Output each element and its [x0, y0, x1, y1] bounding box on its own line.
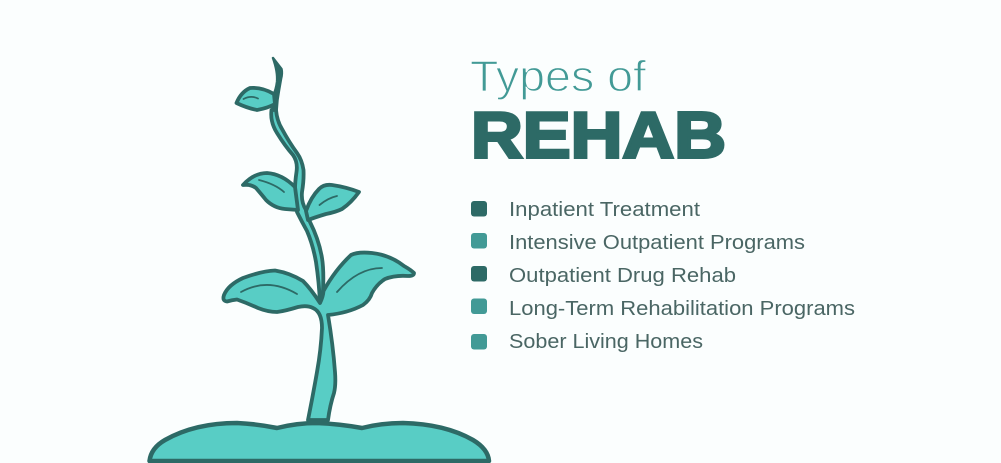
left large leaf vein [241, 285, 297, 294]
middle right leaf vein [320, 196, 337, 205]
item 5: Sober Living Homes [509, 331, 703, 353]
title: Types of: Types of [470, 52, 647, 101]
plant tip [272, 58, 282, 112]
right large leaf vein [337, 268, 382, 292]
item 3: Outpatient Drug Rehab [509, 265, 736, 287]
list of rehab types [471, 199, 855, 353]
middle left leaf vein [259, 180, 284, 192]
ground mound [150, 423, 489, 461]
item 1: Inpatient Treatment [509, 199, 700, 221]
bullet 2 [471, 233, 487, 248]
bullet 3 [471, 266, 487, 282]
large leaves and lower stem [223, 253, 414, 420]
item 4: Long-Term Rehabilitation Programs [509, 298, 855, 320]
upper stem [271, 110, 323, 303]
illustration: growing plant [150, 58, 489, 461]
bullet 1 [471, 201, 487, 216]
top leaf vein [244, 97, 258, 99]
item 2: Intensive Outpatient Programs [509, 232, 805, 254]
bullet 5 [471, 334, 487, 350]
title: REHAB: REHAB [471, 98, 726, 172]
top leaf [236, 88, 275, 110]
bullet 4 [471, 298, 487, 314]
middle left leaf [243, 173, 298, 210]
middle right leaf [306, 185, 359, 220]
